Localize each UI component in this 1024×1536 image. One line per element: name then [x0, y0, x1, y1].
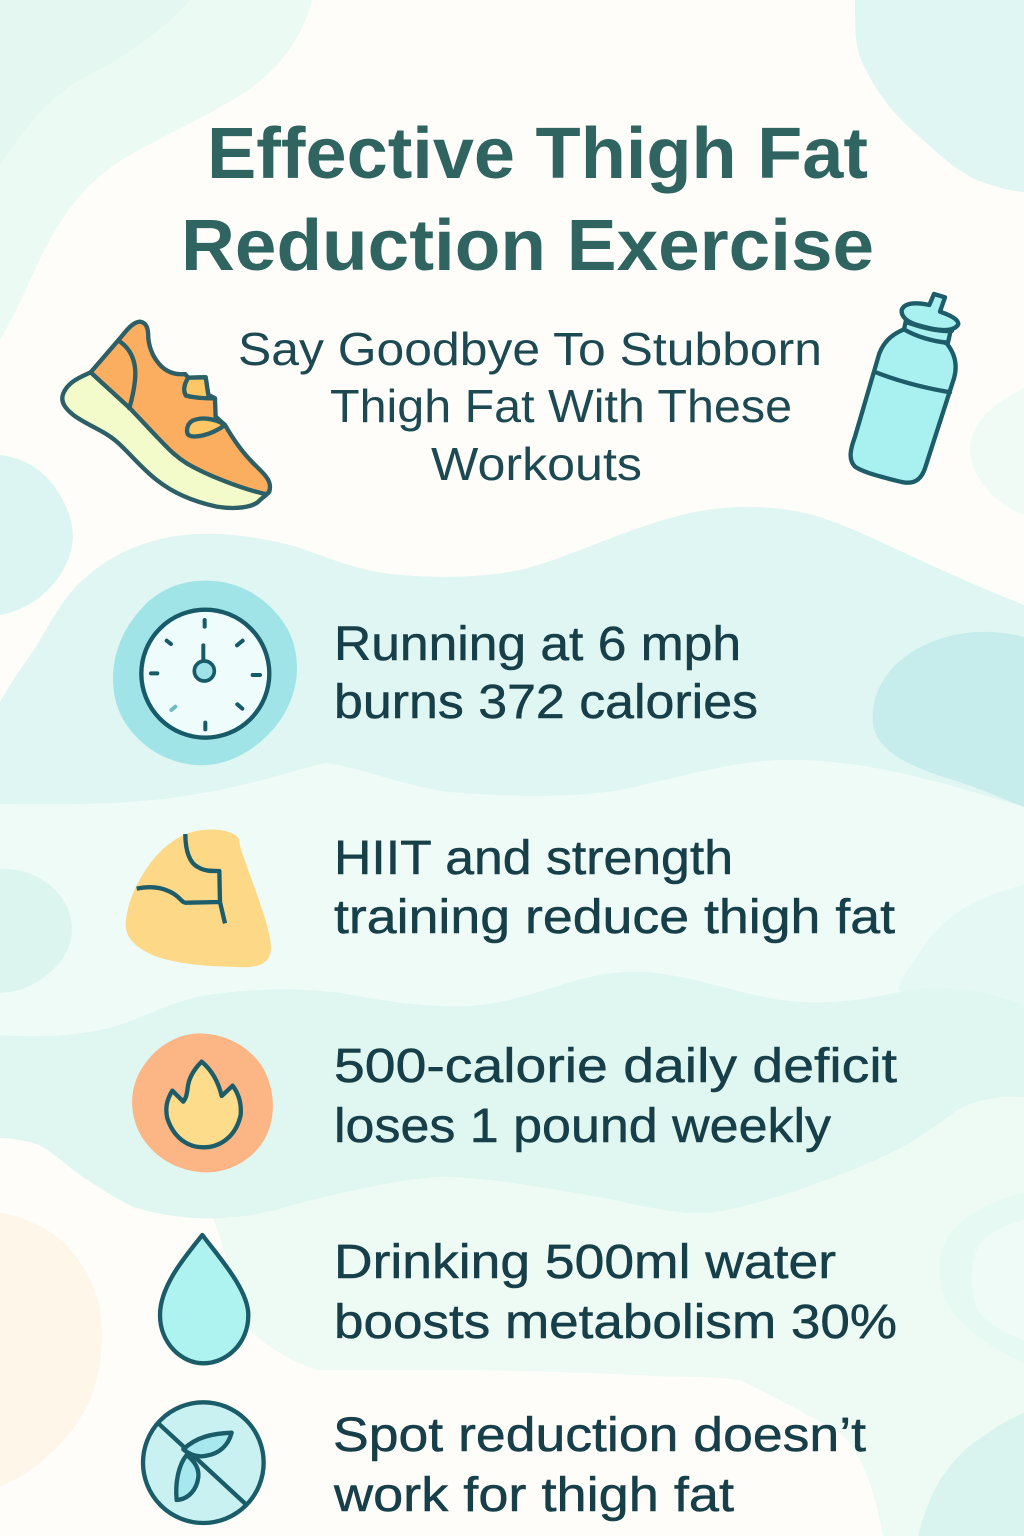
item: running — [113, 581, 758, 765]
text: running: Running at 6 mph — [334, 618, 741, 671]
subtitle: Thigh Fat With These — [330, 380, 792, 432]
text: calorie deficit — [334, 1040, 897, 1153]
icon: water bottle — [851, 294, 958, 483]
icon: flame badge — [132, 1033, 273, 1172]
text: calorie deficit: loses 1 pound weekly — [334, 1100, 831, 1153]
icon: thigh muscle — [126, 830, 271, 967]
text: HIIT: training reduce thigh fat — [334, 891, 895, 944]
icon: water drop — [160, 1235, 248, 1363]
text: water: boosts metabolism 30% — [334, 1296, 897, 1349]
item: HIIT — [126, 830, 895, 967]
text: water: Drinking 500ml water — [334, 1236, 836, 1289]
icon: crossed-out leaf — [143, 1402, 264, 1523]
text: HIIT: HIIT and strength — [334, 832, 733, 885]
item: water — [160, 1235, 897, 1363]
icon: stopwatch dial — [113, 581, 297, 765]
text: HIIT — [334, 832, 895, 944]
title: Reduction Exercise — [181, 206, 874, 286]
icon: running shoe — [62, 322, 270, 508]
subtitle — [238, 323, 822, 490]
text: running: burns 372 calories — [334, 676, 758, 729]
subtitle: Workouts — [431, 438, 642, 490]
title — [181, 114, 874, 286]
text: calorie deficit: 500-calorie daily deficit — [334, 1040, 897, 1093]
item: calorie deficit — [132, 1033, 897, 1172]
text: spot reduction: Spot reduction doesn’t — [333, 1409, 866, 1462]
text: water — [334, 1236, 897, 1349]
text: spot reduction: work for thigh fat — [333, 1469, 734, 1522]
item: spot reduction — [143, 1402, 866, 1523]
title: Effective Thigh Fat — [207, 114, 868, 194]
text: running — [334, 618, 758, 729]
subtitle: Say Goodbye To Stubborn — [238, 323, 822, 375]
text: spot reduction — [333, 1409, 866, 1522]
